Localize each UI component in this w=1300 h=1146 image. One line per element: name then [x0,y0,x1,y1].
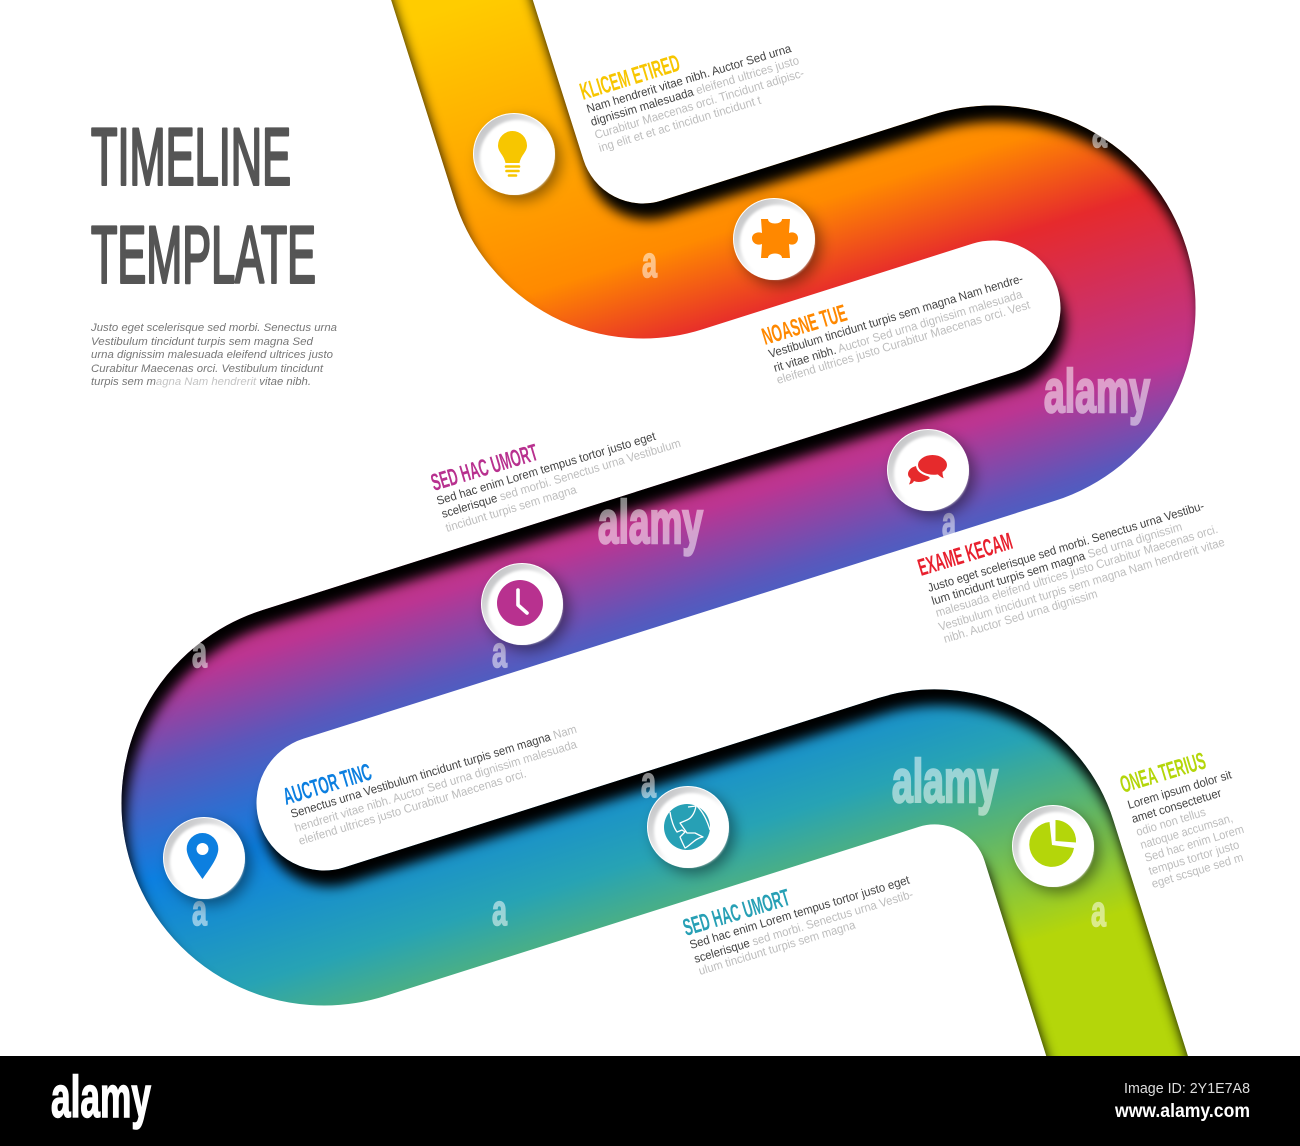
watermarks: alamy [892,748,998,815]
watermarks: a [1092,108,1107,157]
step 7 text: Onea Terius: odio non tellus [1134,805,1207,839]
step 1 text: Klicem Etired: Curabitur Maecenas orci. Tincidunt adipisc- [593,66,806,142]
step 7 text: Onea Terius: amet consectetuer [1130,786,1223,826]
marker: light bulb [473,113,555,195]
step 2 text: Noasne Tue: NOASNE TUE [759,300,850,351]
step 2 text: Noasne Tue: eleifend ultrices justo Curabitur Maecenas orci. Vest [775,297,1032,387]
footer bar [0,1056,1300,1146]
step 3 text: Exame Kecam: lum tincidunt turpis sem magna Sed urna dignissim [930,519,1184,608]
watermarks: alamy [1044,358,1150,425]
step 4 text: Sed Hac Umort (purple): tincidunt turpis sem magna [444,482,578,535]
marker: puzzle piece [733,198,815,280]
step 2 text: Noasne Tue: Vestibulum tincidunt turpis sem magna Nam hendre- [767,271,1025,361]
step 4 text: Sed Hac Umort (purple): scelerisque sed morbi. Senectus urna Vestibulum [440,436,682,521]
step 2 text: Noasne Tue: rit vitae nibh. Auctor Sed urna dignissim malesuada [772,287,1024,375]
step 3 text: Exame Kecam: Justo eget scelerisque sed morbi. Senectus urna Vestibu- [926,499,1206,595]
marker: map pin [163,817,245,899]
step 1 text: Klicem Etired [577,41,806,155]
step 6 text: Sed Hac Umort (teal): SED HAC UMORT [680,884,793,942]
step 1 text: Klicem Etired: KLICEM ETIRED [577,50,683,106]
marker: pie chart [1012,805,1094,887]
step 7 text: Onea Terius: Lorem ipsum dolor sit [1126,767,1234,812]
intro text: urna dignissim malesuada eleifend ultrices justo [91,349,333,361]
step 1 text: Klicem Etired: dignissim malesuada eleifend ultrices justo [589,53,801,129]
watermarks: alamy [598,489,703,556]
intro text: Justo eget scelerisque sed morbi. Senectus urna [90,322,337,334]
watermarks: a [492,628,507,677]
step 5 text: Auctor Tinc: eleifend ultrices justo Curabitur Maecenas orci. [297,766,528,848]
step 6 text: Sed Hac Umort (teal): Sed hac enim Lorem tempus tortor justo eget [688,872,912,952]
watermarks: a [641,758,656,807]
title: TIMELINE [91,112,291,202]
watermarks: a [492,886,507,935]
step 3 text: Exame Kecam: malesuada eleifend ultrices justo Curabitur Maecenas orci. [934,522,1219,620]
step 1 text: Klicem Etired: ing elit et et ac tincidun tincidunt t [597,93,763,155]
step 5 text: Auctor Tinc: hendrerit vitae nibh. Auctor Sed urna dignissim malesuada [293,737,579,835]
footer bar: www.alamy.com [1114,1101,1250,1122]
watermarks: a [1091,887,1106,936]
step 7 text: Onea Terius: tempus tortor justo [1147,837,1241,878]
winding timeline ribbon [189,0,1131,1100]
title: TEMPLATE [91,210,316,300]
step 6 text: Sed Hac Umort (teal): ulum tincidunt turpis sem magna [697,918,857,978]
step 6 text: Sed Hac Umort (teal): scelerisque sed morbi. Senectus urna Vestib- [692,887,915,966]
step 1 text: Klicem Etired: Nam hendrerit vitae nibh. Auctor Sed urna [585,41,793,116]
step 4 text: Sed Hac Umort (purple): Sed hac enim Lorem tempus tortor justo eget [435,429,658,508]
step 4 text: Sed Hac Umort (purple): SED HAC UMORT [428,439,541,497]
watermarks: a [642,238,657,287]
marker: clock [481,563,563,645]
intro text: Curabitur Maecenas orci. Vestibulum tincidunt [91,363,324,375]
watermarks: a [942,498,956,547]
watermarks [192,108,1150,936]
step 3 text: Exame Kecam: Vestibulum tincidunt turpis sem magna Nam hendrerit vitae [937,535,1227,634]
step 5 text: Auctor Tinc: Senectus urna Vestibulum tincidunt turpis sem magna Nam [289,722,578,821]
watermarks: a [192,628,207,677]
intro text: Vestibulum tincidunt turpis sem magna Sed [91,336,314,348]
step 3 text: Exame Kecam [915,499,1227,646]
footer bar: alamy [51,1065,151,1130]
intro text [90,322,337,388]
step 7 text: Onea Terius: ONEA TERIUS [1117,748,1209,799]
step 7 text: Onea Terius: Sed hac enim Lorem [1143,822,1246,865]
intro text: turpis sem m agna Nam hendrerit vitae nibh. [91,376,311,388]
watermarks: a [192,886,207,935]
footer bar: Image ID: 2Y1E7A8 [1124,1080,1250,1097]
step 3 text: Exame Kecam: nibh. Auctor Sed urna dignissim [942,586,1099,646]
step 7 text: Onea Terius [1117,748,1246,891]
step 3 text: Exame Kecam: EXAME KECAM [915,528,1016,582]
step 5 text: Auctor Tinc: AUCTOR TINC [280,759,375,811]
title [91,112,316,300]
marker: globe [647,786,729,868]
marker: chat bubbles [887,429,969,511]
step 7 text: Onea Terius: natoque accumsan, [1138,811,1234,852]
step 7 text: Onea Terius: eget scsque sed m [1150,850,1245,891]
